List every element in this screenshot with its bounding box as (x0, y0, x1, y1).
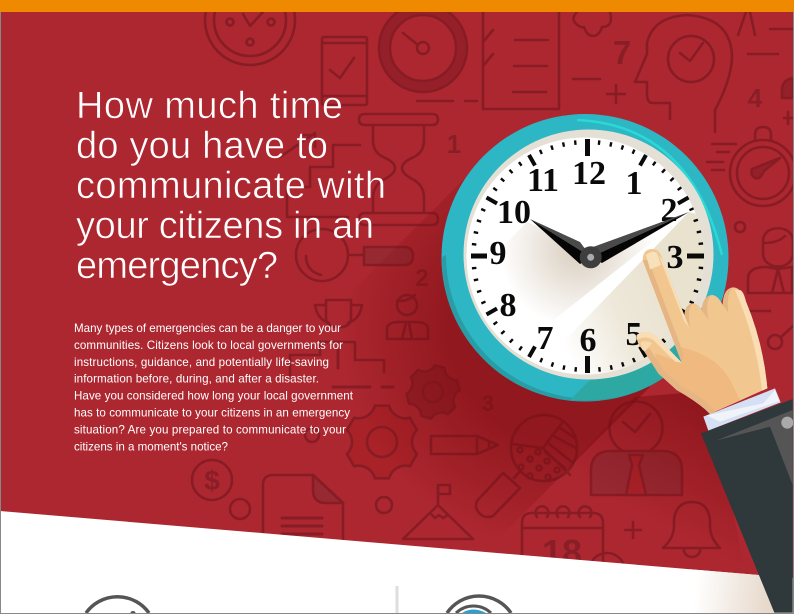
icon: pie chart (511, 415, 577, 481)
icon: dollar coin: $ (204, 465, 220, 496)
clock beige rim (464, 130, 714, 380)
icon: head with check (635, 15, 732, 132)
number 4: 4 (748, 83, 763, 113)
icon: small dashes (417, 100, 477, 102)
icon: watch face (205, 0, 295, 65)
small circle (230, 499, 250, 519)
icon: large gear (347, 406, 417, 478)
hand light edges (637, 255, 767, 391)
clock long shadow (270, 173, 650, 567)
icon: cloud (573, 12, 611, 36)
minute ticks (474, 142, 702, 370)
number 7: 7 (613, 34, 631, 71)
clock numbers: 12 (572, 155, 606, 192)
hand pointing at clock with suit sleeve (637, 249, 793, 613)
clock teal lower-right shade (570, 345, 682, 400)
clock numbers: 8 (500, 287, 516, 324)
icon: magnifier (296, 229, 413, 281)
beige shadow on white panel (690, 569, 794, 614)
number 2: 2 (415, 265, 429, 292)
body text: has to communicate to your citizens in an emergency (74, 406, 350, 420)
icon: bell (663, 502, 720, 557)
icon: magnifier handle (476, 470, 521, 517)
icon: hourglass (359, 114, 438, 225)
orange top bar (0, 0, 794, 12)
icon: phone (322, 37, 367, 105)
hand base (637, 249, 767, 414)
icon: lower steps (290, 342, 384, 375)
clock highlight arc (577, 120, 722, 255)
heading: do you have to (76, 125, 328, 167)
white lower panel (0, 511, 794, 614)
clock teal body (442, 114, 728, 401)
bottom icon right, cropped (447, 596, 511, 613)
icon: network node (768, 335, 782, 349)
small circle mid (376, 497, 392, 513)
thumbnail (641, 341, 652, 352)
hand palm shade (655, 347, 740, 414)
number 1: 1 (447, 129, 461, 159)
icon: globe below calendar (589, 553, 625, 589)
number 3: 3 (482, 391, 494, 416)
icon: ring clock (379, 4, 467, 92)
body text: situation? Are you prepared to communicate to your (74, 424, 346, 436)
icon: calendar (522, 506, 603, 580)
body text: Have you considered how long your local government (74, 390, 354, 402)
vertical divider (396, 586, 398, 613)
bottom icon left, cropped (86, 597, 149, 613)
icon: dark gear (402, 360, 464, 424)
clock numbers: 2 (660, 192, 678, 229)
clock numbers (490, 155, 684, 359)
small circle right (735, 222, 745, 232)
icon: person right (748, 228, 793, 293)
clock numbers: 6 (580, 322, 596, 359)
clock numbers: 7 (536, 320, 554, 357)
heading (76, 85, 386, 287)
number 18: 18 (542, 532, 582, 573)
heading: emergency? (76, 245, 278, 287)
clock numbers: 10 (497, 194, 531, 231)
clock white face (466, 138, 704, 374)
decorative line and node (723, 311, 793, 337)
heading: communicate with (76, 165, 386, 207)
background line icons (192, 0, 794, 589)
body text: Many types of emergencies can be a danger to your (74, 322, 341, 335)
body text: communities. Citizens look to local governments for (74, 339, 343, 352)
icon: shoulder (782, 78, 793, 98)
body text: instructions, guidance, and potentially life-saving (74, 356, 329, 369)
sleeve lighter panel (716, 410, 793, 485)
icon: top right marks (738, 12, 793, 54)
icon: pencil (431, 436, 498, 454)
clock numbers: 9 (490, 235, 506, 272)
hour ticks (471, 139, 704, 373)
icon: stopwatch (707, 127, 794, 206)
shirt cuff highlight (707, 390, 779, 422)
icon: dollar coin (192, 460, 232, 500)
body text: citizens in a moment's notice? (74, 440, 229, 454)
clock (442, 114, 730, 402)
fingernail (646, 252, 661, 269)
clock numbers: 11 (527, 162, 559, 199)
hand dark edges (643, 260, 733, 414)
icon: document (263, 475, 343, 545)
clock numbers: 5 (626, 316, 642, 353)
step number (333, 350, 393, 387)
heading: your citizens in an (76, 205, 374, 247)
icon: plus right (784, 112, 793, 124)
icon: upper steps and arrow (280, 133, 360, 217)
hand long shadow (490, 390, 745, 570)
heading: How much time (76, 85, 343, 127)
icon: trophy (315, 300, 362, 327)
icon: mountain flag (403, 485, 473, 539)
body text (74, 322, 354, 454)
clock hands (530, 212, 689, 268)
icon: person (387, 295, 428, 339)
icon: manager (591, 402, 682, 495)
small circle left (305, 428, 319, 442)
sleeve button (781, 417, 793, 429)
clock numbers: 3 (666, 239, 684, 276)
shirt cuff (703, 388, 781, 431)
suit sleeve (701, 399, 793, 613)
icon: plus lower (625, 522, 641, 538)
icon: plus and dash (573, 79, 625, 103)
clock darker lower-left rim (442, 255, 672, 402)
body text: information before, during, and after a disaster. (74, 372, 319, 386)
icon: checklist (483, 12, 559, 109)
clock numbers: 1 (626, 165, 642, 202)
face shadows (510, 212, 704, 374)
